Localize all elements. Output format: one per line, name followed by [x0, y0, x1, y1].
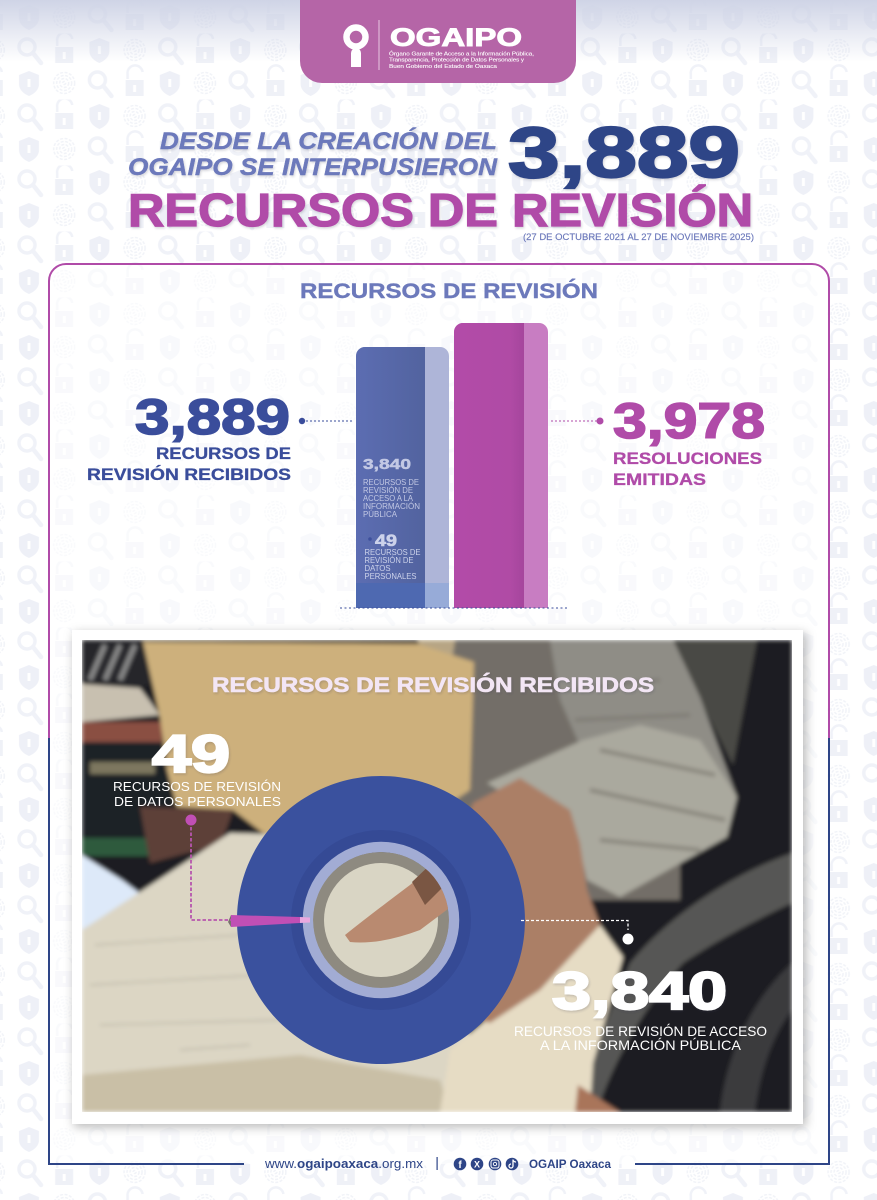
bar label: 3,840 [363, 456, 420, 519]
logo tagline [389, 50, 534, 70]
bar label: 3,840: PÚBLICA [363, 510, 398, 519]
bar label: 49: 49 [375, 531, 397, 550]
callout: 3,840: 3,840 [552, 962, 727, 1021]
title: 3,889 [508, 114, 740, 193]
stat: resoluciones emitidas [613, 393, 765, 489]
bar label: 49: PERSONALES [364, 572, 416, 581]
icon: OGAIPO logo mark [346, 28, 366, 67]
icon: facebook: f [458, 1160, 462, 1171]
donut chart [228, 776, 525, 1064]
title: RECURSOS DE REVISIÓN [128, 184, 753, 236]
logo tagline: Transparencia, Protección de Datos Personales y [389, 58, 524, 64]
bar label: 3,840: ACCESO A LA [363, 494, 414, 503]
title: DESDE LA CREACIÓN DEL [160, 127, 497, 155]
icon: x [471, 1158, 483, 1170]
stat: recursos recibidos: 3,889 [135, 389, 290, 445]
callout: 3,840: RECURSOS DE REVISIÓN DE ACCESO [514, 1023, 767, 1039]
icon: instagram [489, 1158, 501, 1170]
sleeve [549, 640, 740, 796]
logo tagline: Órgano Garante de Acceso a la Información Pública, [389, 50, 534, 58]
callout: 49 [113, 725, 281, 920]
bar: resoluciones [454, 323, 548, 608]
callout: 49: DE DATOS PERSONALES [114, 794, 281, 809]
icon: tiktok [506, 1158, 518, 1170]
paper under hand [440, 925, 623, 1112]
bar: recibidos [340, 323, 568, 637]
icon: facebook [454, 1158, 466, 1171]
bar label: 3,840: 3,840 [363, 456, 411, 473]
callout: 49: RECURSOS DE REVISIÓN [113, 779, 281, 794]
chair back strip [673, 640, 757, 765]
bar label: 49: REVISIÓN DE [364, 556, 414, 565]
photo heading: RECURSOS DE REVISIÓN RECIBIDOS [212, 673, 654, 697]
header logo banner [300, 0, 576, 83]
bar label: 49: RECURSOS DE [364, 548, 420, 557]
donut centre photo [313, 852, 460, 988]
icon: x: X [474, 1160, 480, 1170]
bar label: 49 [364, 531, 420, 581]
bar label: 3,840: REVISIÓN DE [363, 486, 413, 495]
donut segment: 49 [228, 915, 310, 927]
stat: resoluciones emitidas: RESOLUCIONES [613, 449, 762, 468]
callout: 3,840 [514, 920, 767, 1053]
bar label: 3,840: INFORMACIÓN [363, 502, 420, 511]
footer website: www.ogaipoaxaca .org.mx [264, 1157, 424, 1171]
stat: resoluciones emitidas: 3,978 [613, 393, 765, 449]
bar label: 49: DATOS [364, 564, 390, 573]
stat: recursos recibidos: RECURSOS DE [156, 444, 291, 463]
callout: 49: 49 [152, 725, 230, 784]
logo wordmark: OGAIPO [390, 24, 522, 52]
folder [418, 640, 455, 660]
connector: left [299, 418, 352, 424]
connector: right [551, 418, 604, 424]
footer [264, 1157, 612, 1171]
armrest [591, 851, 792, 1100]
callout: 3,840: A LA INFORMACIÓN PÚBLICA [540, 1037, 742, 1053]
section heading: RECURSOS DE REVISIÓN [300, 279, 598, 303]
title: OGAIPO SE INTERPUSIERON [128, 154, 498, 181]
bar label: 3,840: RECURSOS DE [363, 478, 419, 487]
sweater body [440, 640, 680, 900]
stat: recursos recibidos [87, 389, 291, 484]
title [128, 114, 753, 236]
panel frame [49, 264, 829, 1164]
logo tagline: Buen Gobierno del Estado de Oaxaca [389, 64, 498, 70]
footer handle: OGAIP Oaxaca [529, 1159, 612, 1171]
stat: resoluciones emitidas: EMITIDAS [613, 470, 706, 489]
top left dark stripes [82, 640, 152, 685]
photo: hands sorting folders [82, 640, 792, 1112]
papers [82, 855, 142, 930]
hand [440, 778, 600, 1023]
bar chart [72, 323, 806, 1171]
photo panel [72, 630, 806, 1127]
stat: recursos recibidos: REVISIÓN RECIBIDOS [87, 465, 291, 484]
date range: (27 DE OCTUBRE 2021 AL 27 DE NOVIEMBRE 2025) [523, 232, 754, 242]
